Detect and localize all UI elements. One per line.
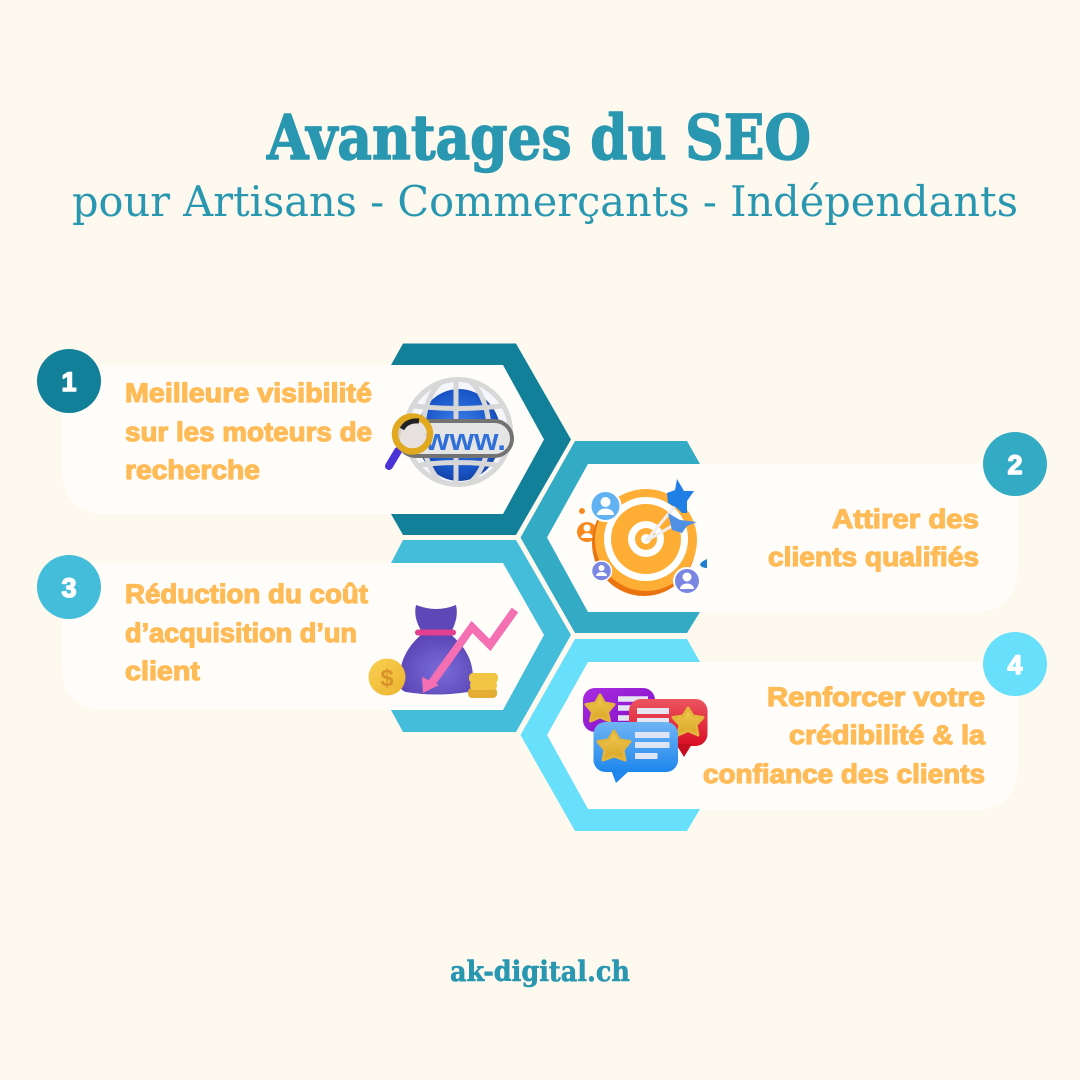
panel 1 background [62,365,544,514]
title: Avantages du SEO [266,101,811,174]
panel 3 background [62,563,544,710]
panel 3 hexagon band [391,540,571,732]
panel 2: clients qualifiés [520,432,1047,633]
panel 4 number badge [983,632,1047,696]
panel 3: coût d'acquisition [37,540,571,732]
icon: www globe with magnifier: www. [424,422,506,457]
panel 3 text [125,579,368,686]
panel 2 text: Attirer des [832,504,979,534]
panel 1 text [125,378,372,485]
panel 4 text: crédibilité & la [789,720,986,750]
panel 3 text: Réduction du coût [125,579,368,609]
panel 2 text [768,504,979,572]
panel 1 number badge [37,349,101,413]
panel 3 number badge [37,555,101,619]
panel 4 text: Renforcer votre [767,682,985,712]
footer website: ak-digital.ch [450,955,630,988]
subtitle: pour Artisans - Commerçants - Indépendants [72,177,1018,226]
panel 1 text: recherche [125,455,260,485]
panel 1 text: sur les moteurs de [125,417,372,447]
panel 1 number badge: 1 [61,367,77,397]
panel 4: crédibilité [520,632,1047,831]
panel 4 text: confiance des clients [703,759,985,789]
icon: review speech bubbles with stars [583,688,708,783]
panel 1 hexagon band [391,344,571,535]
panel 2 background [547,464,1018,612]
icon: www globe with magnifier [389,376,513,488]
icon: money bag with falling arrow and coins [368,605,515,698]
panel 3 number badge: 3 [61,573,77,603]
panel 2 number badge: 2 [1007,450,1023,480]
panel 2 number badge [983,432,1047,496]
panel 4 hexagon band [520,639,700,831]
panel 3 text: d’acquisition d’un [125,618,357,648]
icon: money bag with falling arrow and coins: $ [380,665,394,692]
panel 1: visibilité [37,344,571,535]
panel 3 text: client [125,656,200,686]
panel 1 text: Meilleure visibilité [125,378,372,408]
panel 4 number badge: 4 [1007,650,1023,680]
panel 2 text: clients qualifiés [768,542,979,572]
icon: target with darts and people [577,479,707,596]
panel 4 text [703,682,986,789]
panel 2 hexagon band [520,441,700,633]
panel 4 background [547,662,1018,810]
